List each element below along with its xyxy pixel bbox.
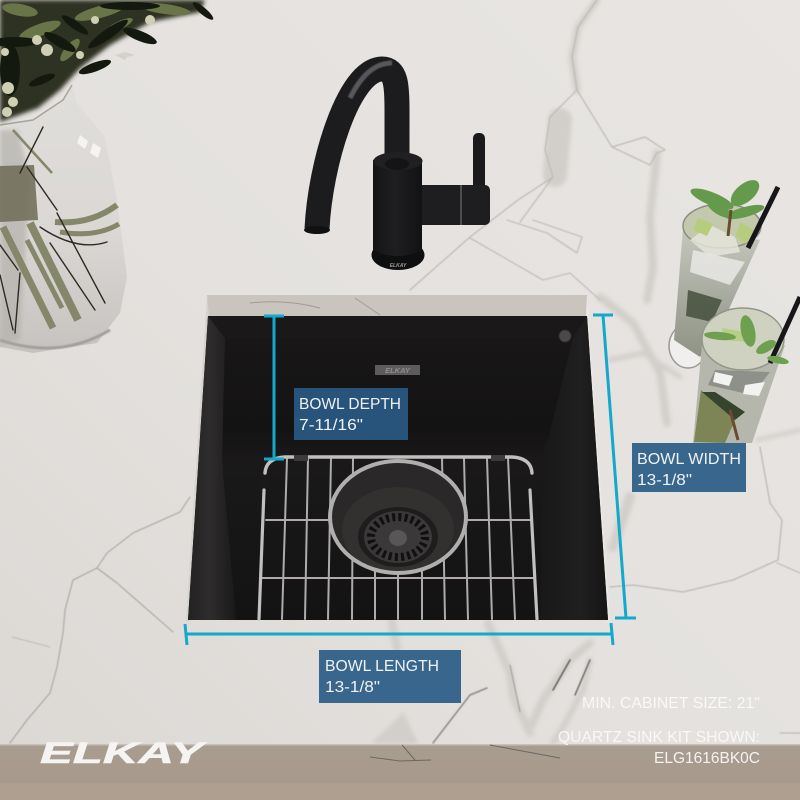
label: bowl width: BOWL WIDTH [637,451,741,468]
sink kit note [558,729,760,767]
label: bowl width [632,443,746,492]
bowl width dimension line [593,315,636,618]
sink ledge [186,295,610,621]
label: bowl length [319,650,461,703]
sink kit note: ELG1616BK0C [654,750,760,767]
label: bowl length: BOWL LENGTH [325,658,439,675]
wire rack [259,455,537,619]
counter front edge [0,744,800,800]
drain strainer [330,461,466,573]
sink bowl [188,316,608,620]
sink [186,295,610,621]
back glass [669,175,778,368]
label: bowl depth [294,388,408,440]
brand logo: ELKAY [40,737,208,770]
bowl length dimension line [185,623,613,645]
faucet base: ELKAY [390,263,407,269]
bowl depth dimension line [264,316,284,459]
vase with plant [0,0,215,353]
faucet base [372,152,424,270]
drinking glasses [669,175,800,443]
logo plate [375,365,420,375]
lever handle [410,133,490,225]
label: bowl depth: BOWL DEPTH [299,396,401,413]
faucet [304,63,490,270]
label: bowl length: 13-1/8" [325,679,380,696]
minimum cabinet size note: MIN. CABINET SIZE: 21" [582,695,760,712]
front glass [693,297,800,443]
sink kit note: QUARTZ SINK KIT SHOWN: [558,729,760,746]
label: bowl depth: 7-11/16" [299,417,363,434]
label: bowl width: 13-1/8" [637,472,692,489]
logo plate: ELKAY [385,366,411,375]
